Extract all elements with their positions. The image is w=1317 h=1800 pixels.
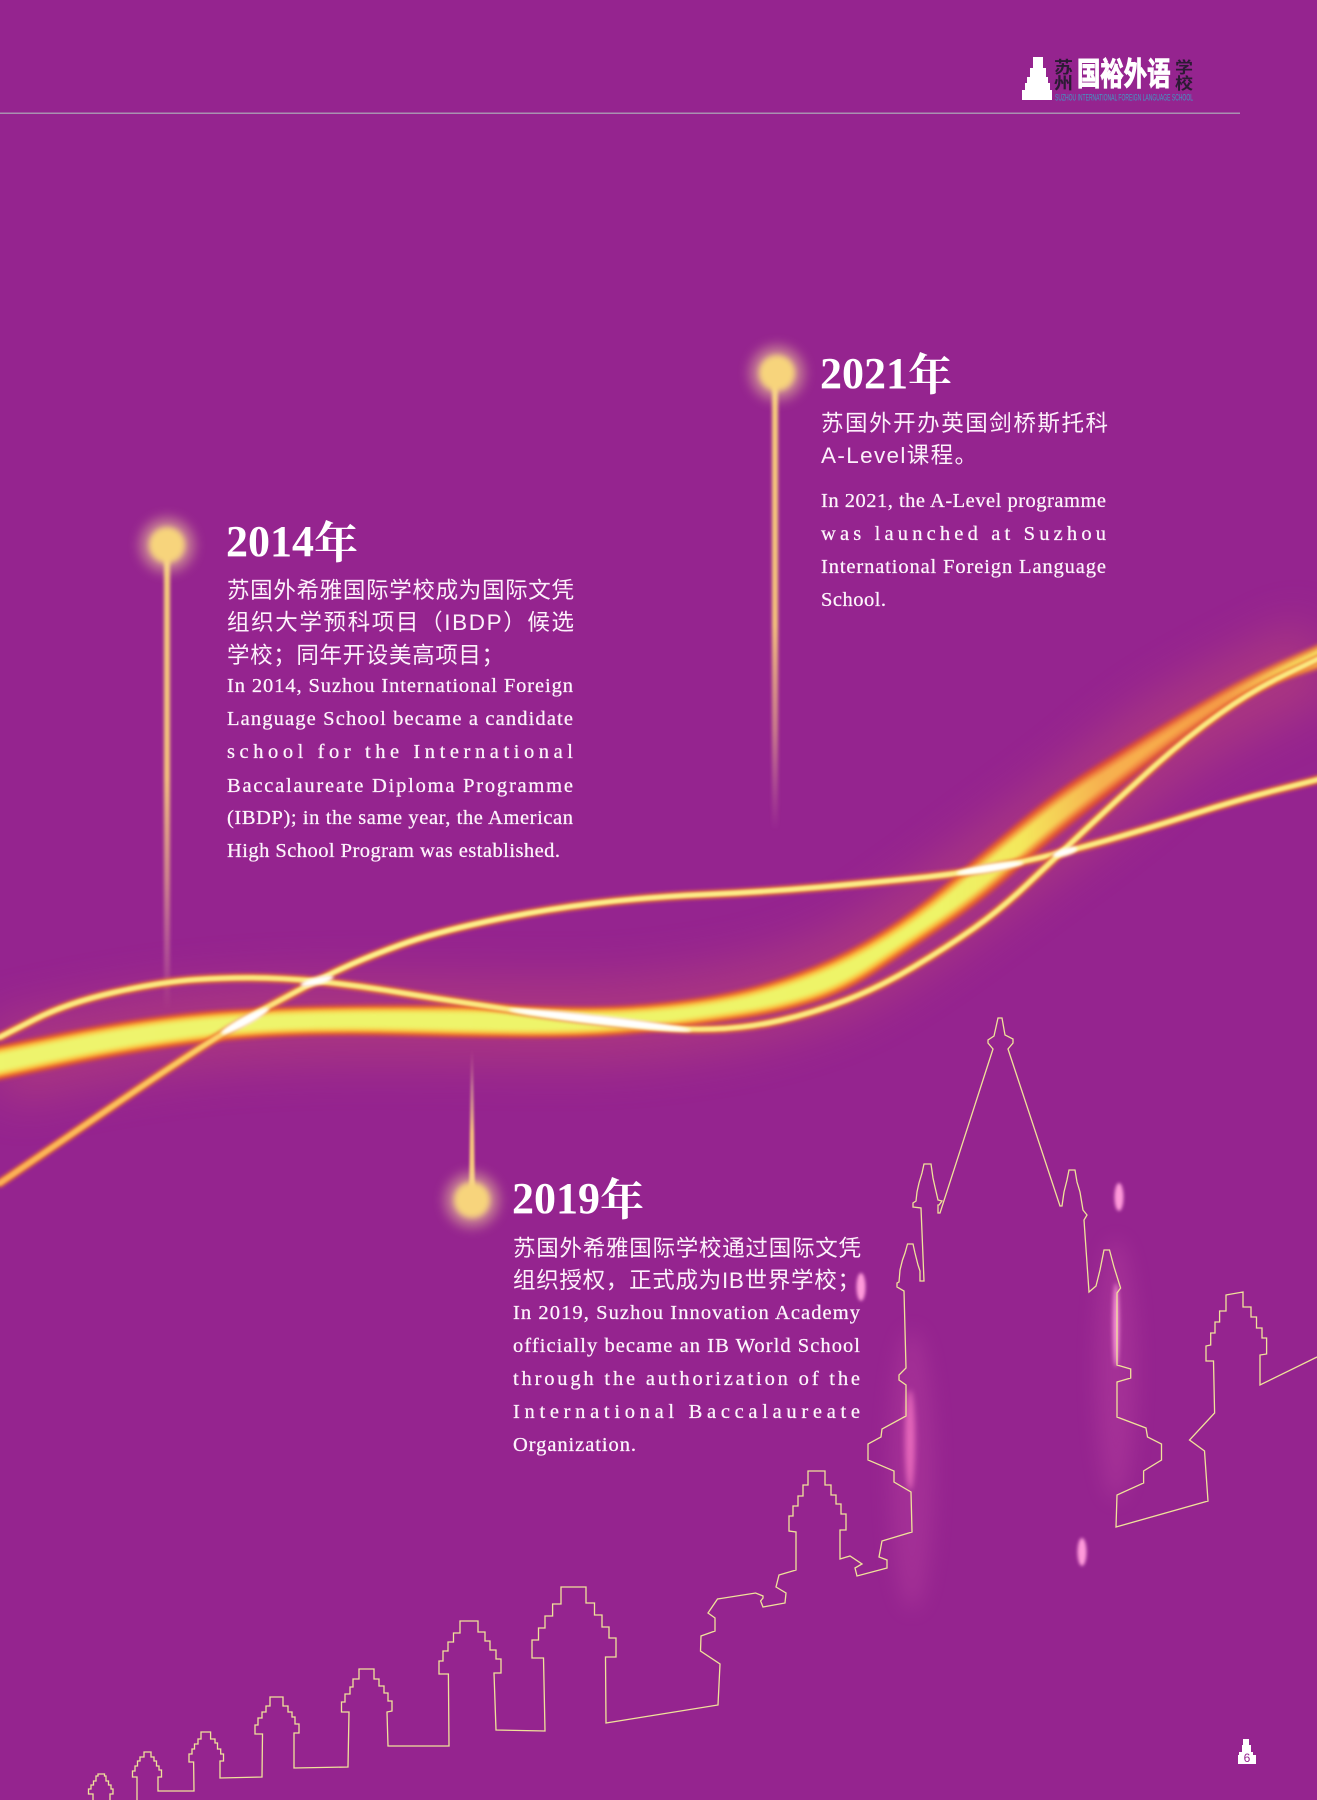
icon: pagoda badge	[1238, 1739, 1256, 1764]
English description: 2019: International Baccalaureate	[513, 1401, 860, 1423]
page number: 6	[1244, 1751, 1251, 1765]
heading: 2014: 年	[314, 519, 358, 568]
English description: 2019: officially became an IB World School	[513, 1335, 860, 1357]
Chinese description: 2014: 学校；同年开设美高项目；	[227, 643, 504, 668]
Chinese description: 2014: 组织大学预科项目（IBDP）候选	[227, 610, 574, 635]
small clipped tower	[88, 1774, 113, 1800]
Chinese description: 2019: 苏国外希雅国际学校通过国际文凭	[513, 1236, 861, 1261]
Chinese description: 2021: 苏国外开办英国剑桥斯托科	[821, 411, 1108, 436]
Chinese description: 2021	[821, 411, 1108, 468]
English description: 2014: (IBDP); in the same year, the American	[227, 807, 573, 829]
English description: 2021: School.	[821, 589, 886, 611]
Chinese description: 2014	[227, 578, 574, 668]
white crossing highlights	[219, 845, 1079, 1038]
Chinese description: 2019	[513, 1236, 861, 1293]
guide line and dot: 2021	[750, 346, 804, 830]
text block: 2014	[226, 517, 574, 862]
English description: 2019	[513, 1302, 861, 1456]
English description: 2021: International Foreign Language	[821, 556, 1106, 578]
English description: 2019: Organization.	[513, 1434, 636, 1456]
main skyline silhouette	[132, 1018, 1317, 1800]
Chinese description: 2019: 组织授权，正式成为IB世界学校；	[513, 1268, 860, 1293]
wide ribbon	[0, 635, 1317, 1085]
thin rising ribbon	[0, 779, 1317, 1183]
heading: 2019: 2019	[512, 1174, 600, 1223]
header: school logo and rule	[0, 57, 1240, 114]
English description: 2021: was launched at Suzhou	[821, 523, 1106, 545]
logo text: 苏州	[1054, 58, 1073, 93]
English description: 2014: High School Program was established.	[227, 840, 560, 862]
Chinese description: 2014: 苏国外希雅国际学校成为国际文凭	[227, 578, 574, 603]
school skyline outline	[88, 1018, 1317, 1800]
English description: 2019: In 2019, Suzhou Innovation Academy	[513, 1302, 861, 1324]
logo text: 学校	[1175, 58, 1193, 93]
heading: 2021: 年	[908, 351, 952, 400]
icon: logo pagoda	[1022, 57, 1052, 100]
thin wave ribbon	[0, 658, 1317, 1037]
Chinese description: 2021: A-Level课程。	[821, 443, 977, 468]
page number badge	[1238, 1739, 1256, 1765]
logo text: 学校: 校	[1175, 74, 1193, 93]
English description: 2014: In 2014, Suzhou International Foreign	[227, 675, 573, 697]
logo text: 学校: 学	[1175, 58, 1193, 77]
heading: 2019: 年	[600, 1176, 644, 1225]
header rule	[0, 112, 1240, 114]
logo text: 苏州: 苏	[1054, 58, 1073, 77]
text block: 2019	[512, 1174, 861, 1456]
English description: 2021: In 2021, the A-Level programme	[821, 490, 1106, 512]
English description: 2014: Baccalaureate Diploma Programme	[227, 775, 573, 797]
English description: 2014: school for the International	[227, 741, 573, 763]
English description: 2021	[821, 490, 1106, 611]
logo text: 国裕外语: 国裕外语	[1077, 57, 1171, 92]
ribbon halo	[0, 656, 1317, 1063]
English description: 2014	[227, 675, 573, 862]
logo text: 苏州: 州	[1054, 74, 1073, 93]
glowing light ribbons	[0, 635, 1317, 1183]
heading: 2014: 2014	[226, 517, 314, 566]
logo subtitle: SUZHOU INTERNATIONAL FOREIGN LANGUAGE SCHOOL	[1055, 92, 1193, 104]
English description: 2019: through the authorization of the	[513, 1368, 860, 1390]
heading: 2021: 2021	[820, 349, 908, 398]
English description: 2014: Language School became a candidate	[227, 708, 573, 730]
guide line and dot: 2014	[140, 518, 194, 1010]
guide line and dot: 2019	[445, 1050, 499, 1227]
text block: 2021	[820, 349, 1108, 611]
pink light glows on skyline	[856, 1183, 1136, 1610]
